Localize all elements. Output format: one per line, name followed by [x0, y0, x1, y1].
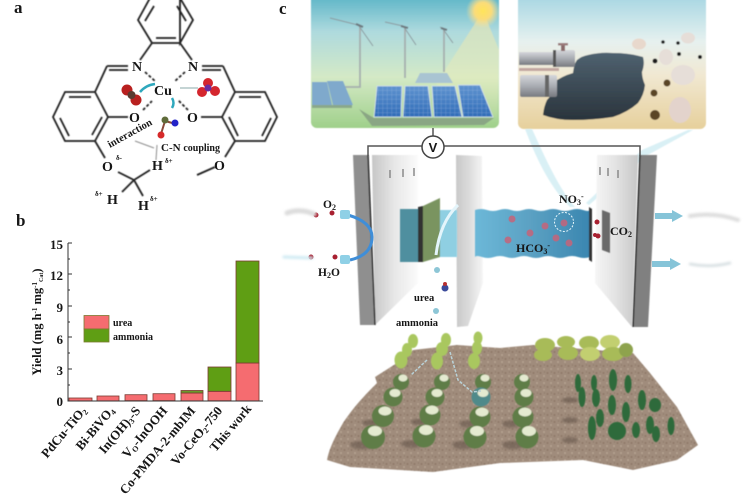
chamber species labels: 3 [577, 198, 581, 207]
circuit wire [368, 128, 640, 156]
chemical skeleton bonds [53, 0, 277, 196]
y-axis tick labels: 15 [50, 237, 64, 252]
discharge pipes [519, 43, 575, 97]
product stream arc [436, 205, 458, 255]
x-axis category labels: 4 [109, 408, 118, 417]
leafy yellow-green crop [534, 335, 633, 361]
y-axis tick labels: 12 [50, 268, 63, 283]
x-axis category labels: In(OH) [95, 415, 133, 456]
chamber species labels: 3 [543, 247, 547, 256]
C-N coupling label: C-N coupling [161, 142, 220, 154]
soil ground [327, 345, 698, 472]
atom labels: N [132, 60, 142, 75]
atom labels: δ+ [150, 195, 158, 203]
atom labels [95, 60, 225, 214]
y-axis tick labels: 0 [56, 394, 63, 409]
x-axis category labels: Vo-CeO [167, 425, 207, 468]
x-axis category labels: -InOOH [129, 403, 170, 449]
x-axis category labels: Co-PMDA-2-mbIM [116, 403, 198, 497]
middle membrane plate [456, 155, 483, 327]
atom labels: H [107, 193, 118, 208]
atom labels: δ- [116, 154, 123, 162]
urea intermediate molecule [158, 116, 178, 138]
atom labels: Cu [154, 84, 172, 99]
chamber species labels [318, 192, 632, 329]
y-axis title: -1 [31, 307, 39, 313]
atom labels: N [188, 60, 198, 75]
chamber species labels: O [331, 267, 340, 279]
bars [69, 261, 259, 401]
irrigation streams [411, 352, 481, 392]
chamber species labels: O [323, 199, 332, 211]
panel b: yield bar chart [16, 211, 263, 497]
chamber species labels: ammonia [396, 318, 439, 329]
y-axis tick labels [50, 237, 64, 409]
voltmeter: V [429, 140, 438, 155]
right inlet and outlet arrows [652, 210, 683, 270]
atom labels: δ+ [95, 190, 103, 198]
chamber species labels: HCO [516, 241, 543, 255]
interaction label: interaction [106, 117, 154, 151]
legend: urea [113, 318, 132, 329]
chamber species labels: - [547, 241, 550, 250]
x-axis category labels: V [119, 444, 136, 461]
pigs [632, 32, 695, 123]
x-axis category labels: 2 [201, 426, 211, 435]
x-axis category labels: -750 [198, 403, 225, 431]
chamber species labels: - [581, 192, 584, 201]
light beams linking scenes to cathode [525, 129, 693, 207]
chamber species labels: 2 [628, 230, 632, 239]
panel c: electrolyser system [279, 0, 738, 472]
chamber species labels: NO [559, 192, 577, 206]
sun [466, 0, 500, 28]
wind turbines [330, 18, 453, 87]
product droplets [433, 267, 448, 314]
x-axis category labels: PdCu-TiO [38, 406, 87, 461]
chamber species labels: 2 [332, 203, 336, 212]
sun rays [436, 11, 499, 118]
x-axis category labels: This work [206, 401, 255, 454]
waste droppings [650, 40, 702, 120]
sky and sand background [518, 0, 706, 129]
x-axis category labels: -S [124, 403, 143, 422]
chamber species labels: H [318, 267, 327, 279]
front solar panels [374, 85, 493, 117]
y-axis title: Cat [39, 273, 45, 282]
x-axis category labels: 2 [81, 408, 90, 417]
y-axis tick labels: 9 [56, 300, 64, 315]
oil puddle [543, 53, 645, 120]
rear solar panels [312, 73, 453, 108]
y-axis title: -1 [31, 282, 39, 288]
atom labels: O [214, 159, 225, 174]
gas molecules [308, 210, 600, 260]
anode chamber electrolyte [400, 198, 457, 262]
axes [68, 243, 263, 401]
atom labels: O [129, 111, 140, 126]
sky background [311, 0, 499, 128]
atom labels: δ+ [165, 157, 173, 165]
nitrate highlight ring [554, 212, 574, 232]
x-axis category labels: O [130, 444, 141, 454]
atom labels: O [102, 160, 113, 175]
y-axis title: mg [30, 287, 44, 308]
NO3 molecule [197, 78, 220, 97]
left inlet and outlet arrows [340, 210, 350, 264]
nitrate ions [504, 216, 572, 246]
x-axis category labels: 3 [127, 417, 137, 425]
voltmeter [422, 136, 444, 158]
atom labels: H [152, 159, 163, 174]
panel label b: b [16, 211, 25, 230]
farmland scene [327, 332, 698, 472]
right plate [595, 155, 638, 327]
plant shadows [350, 397, 578, 449]
y-axis title: Yield (mg h [30, 313, 44, 376]
atom labels: O [187, 111, 198, 126]
chamber species labels: CO [610, 224, 628, 238]
chamber species labels: urea [414, 293, 435, 304]
plate slot marks [390, 167, 618, 178]
cabbage rows [361, 374, 538, 449]
left plate [372, 155, 418, 325]
wastewater scene [518, 0, 706, 129]
back electrode plates [353, 155, 657, 327]
tall green crop rows [575, 369, 674, 442]
panel shadow [359, 109, 494, 126]
y-axis tick labels: 6 [56, 332, 64, 347]
y-axis title: ) [30, 268, 44, 273]
legend [84, 316, 153, 343]
x-axis category labels: Bi-BiVO [72, 406, 115, 453]
teal interaction arrows [140, 84, 198, 108]
lettuce rows [394, 332, 482, 370]
panel a: molecular structure [14, 0, 277, 214]
left circulation arrow [348, 215, 372, 260]
cathode chamber electrolyte [475, 207, 610, 262]
y-axis tick labels: 3 [56, 363, 64, 378]
x-axis category labels [38, 401, 255, 497]
legend: ammonia [113, 332, 153, 343]
renewable energy scene [311, 0, 500, 128]
chamber species labels: 2 [327, 271, 331, 280]
gas flow wisps [284, 211, 738, 266]
atom labels: H [138, 199, 149, 214]
CO2 molecule [122, 84, 142, 106]
